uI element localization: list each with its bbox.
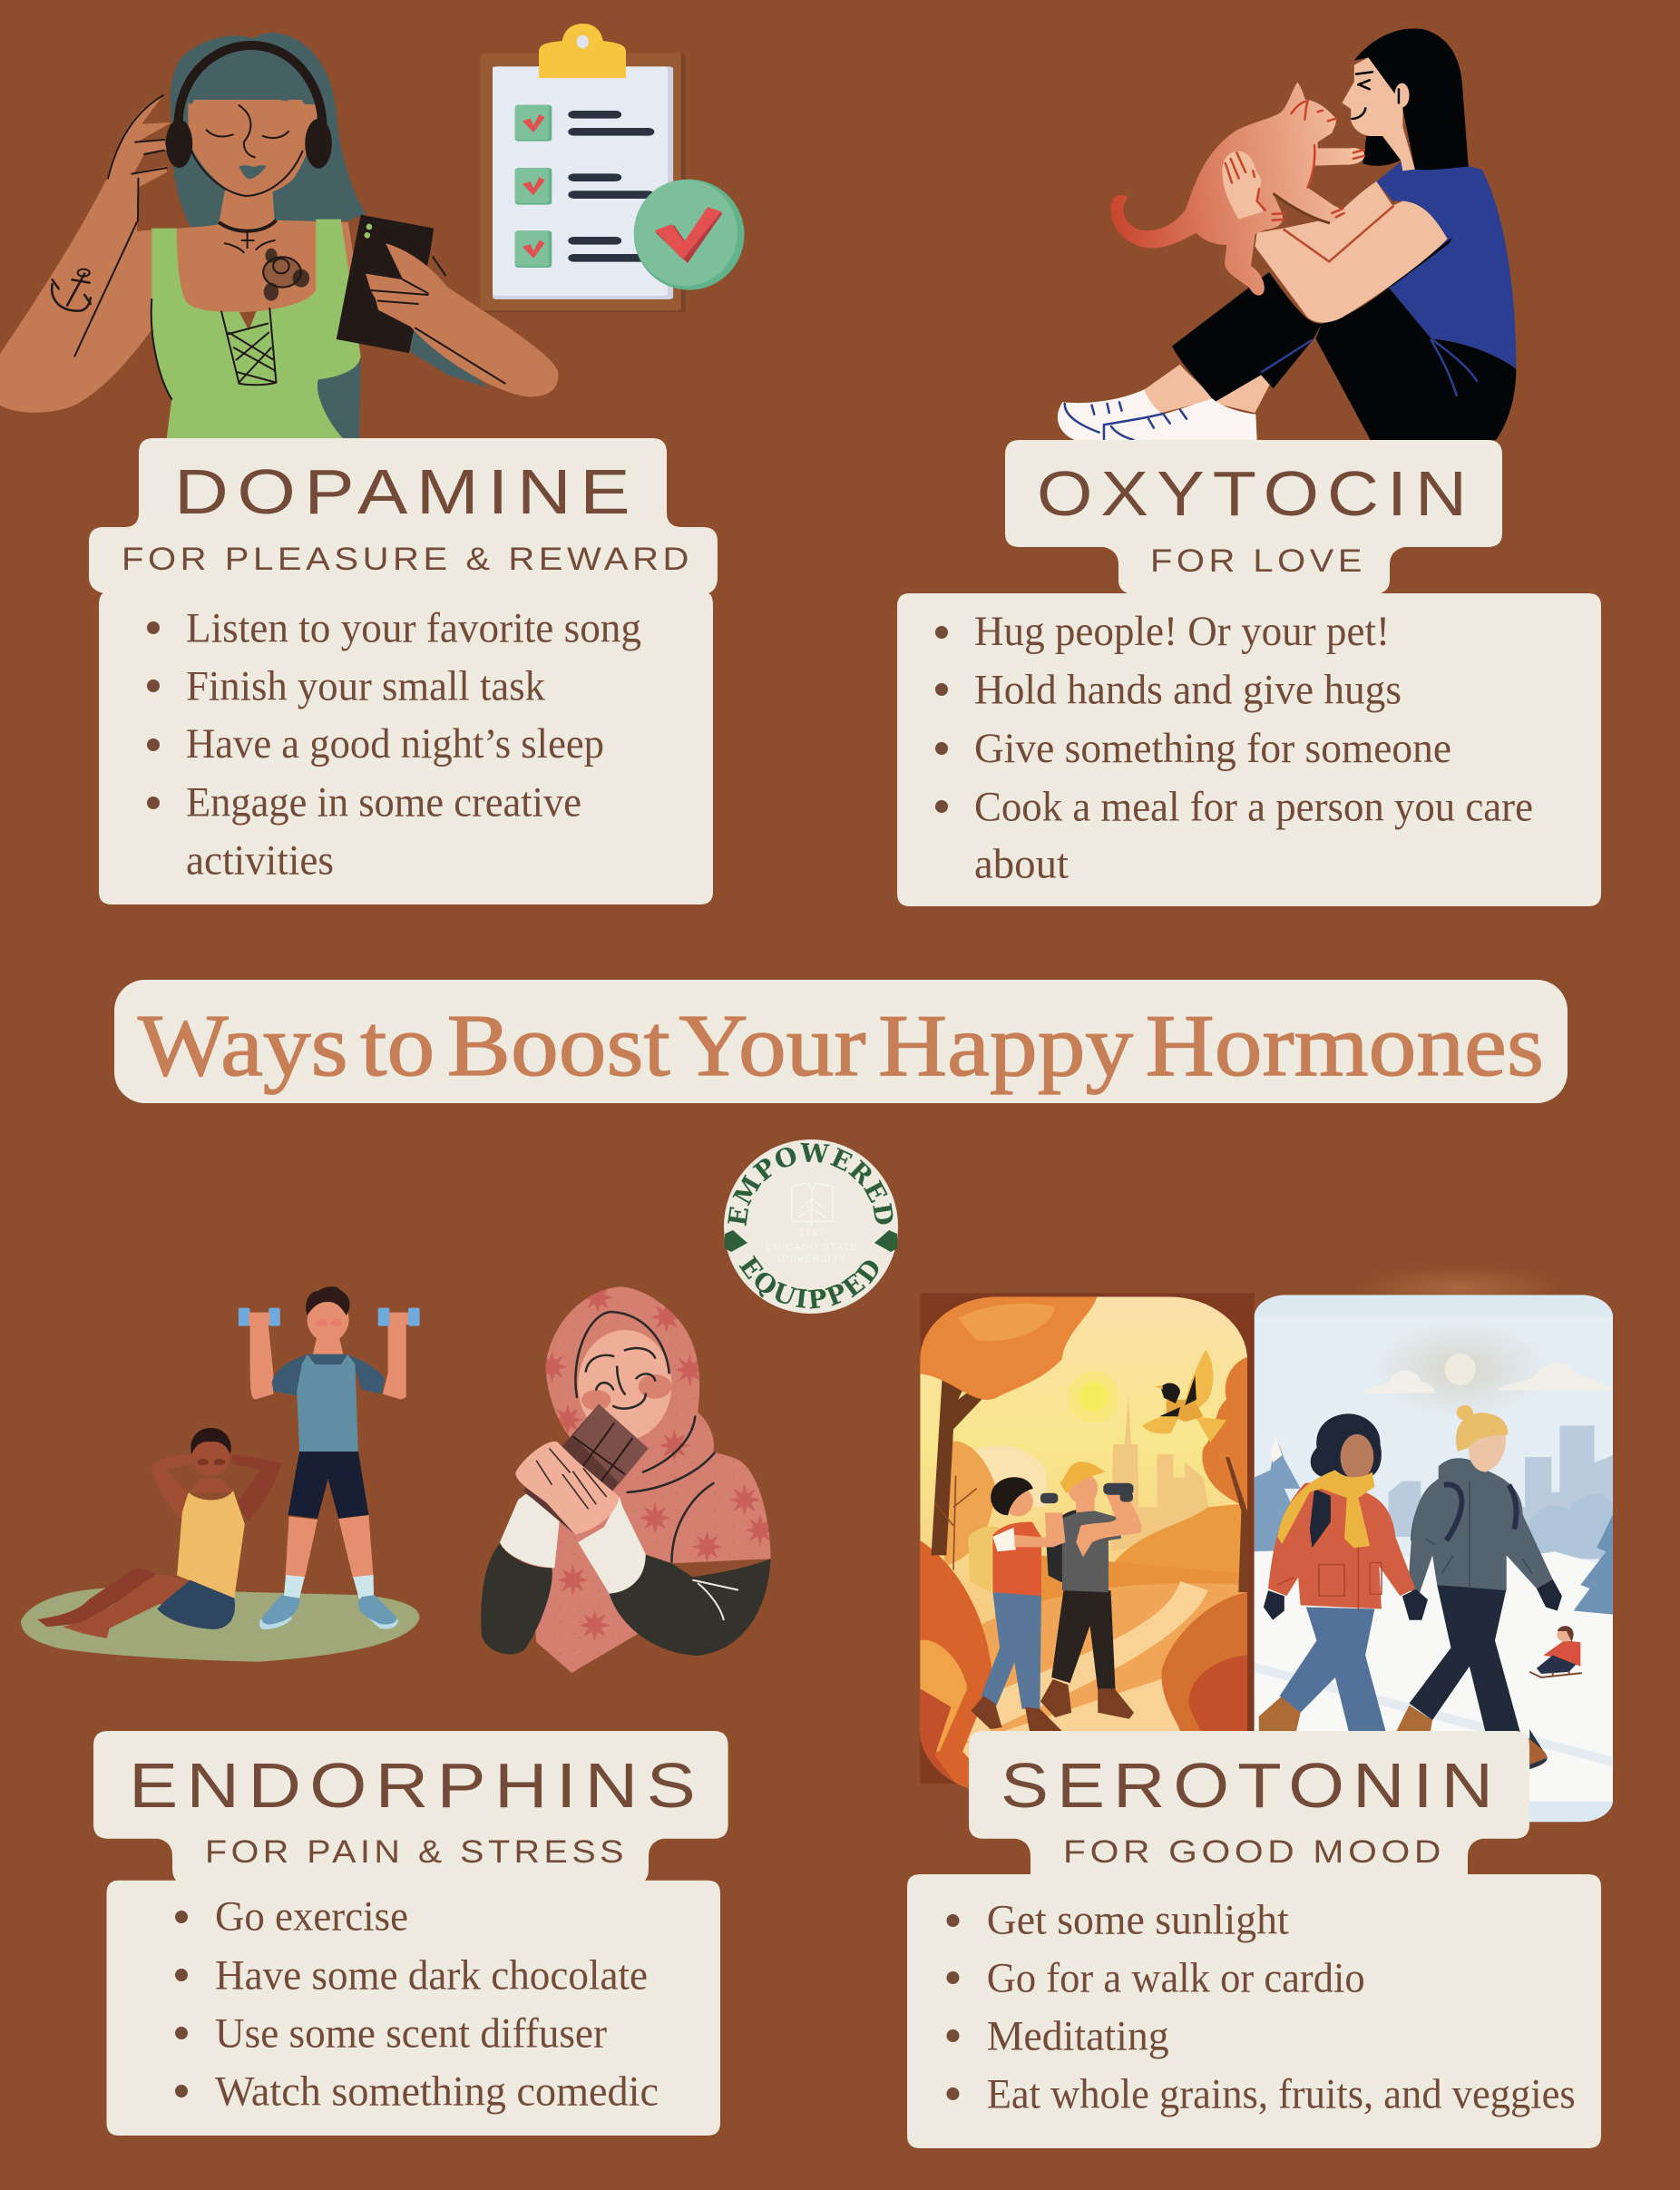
- bullet list: about: [974, 840, 1069, 887]
- man with dumbbells: [239, 1286, 420, 1629]
- sled child: [1529, 1626, 1582, 1677]
- bullet list: [935, 608, 1533, 887]
- bullet list: Watch something comedic: [215, 2068, 659, 2116]
- heading: DOPAMINE: [174, 456, 639, 527]
- scene: autumn: [920, 1296, 1247, 1793]
- tattoo: anchor: [52, 274, 91, 311]
- subheading: FOR PAIN & STRESS: [205, 1834, 628, 1870]
- heading: ENDORPHINS: [129, 1750, 704, 1821]
- panel shape: [907, 1731, 1601, 2148]
- badge text top: EMPOWERED: [728, 1143, 893, 1227]
- chocolate bar: [523, 1404, 649, 1535]
- illustration: clipboard with checklist: [480, 24, 745, 312]
- bird: [1142, 1350, 1226, 1442]
- illustration: woman with headphones and phone: [0, 33, 559, 438]
- bullet list: Cook a meal for a person you care: [974, 784, 1533, 831]
- bullet list: Listen to your favorite song: [186, 604, 641, 651]
- cat: [1110, 83, 1364, 296]
- panel shape: [89, 438, 718, 904]
- heading: SEROTONIN: [1001, 1750, 1501, 1821]
- university text: 1887: [799, 1227, 825, 1238]
- panel shape: [897, 440, 1601, 906]
- icon: side hands: [725, 1230, 897, 1252]
- bullet list: Eat whole grains, fruits, and veggies: [987, 2070, 1576, 2117]
- bullet list: Finish your small task: [186, 662, 545, 709]
- people: winter walkers: [1259, 1405, 1562, 1769]
- illustration: woman hugging cat: [1058, 28, 1516, 440]
- people: birdwatchers: [968, 1462, 1141, 1732]
- bullet list: Have some dark chocolate: [215, 1952, 648, 1999]
- bullet list: Hug people! Or your pet!: [974, 608, 1390, 655]
- icon: big check badge: [634, 180, 745, 290]
- tattoo: rose: [263, 249, 309, 301]
- subheading: FOR GOOD MOOD: [1063, 1834, 1445, 1870]
- bullet list: [947, 1896, 1576, 2117]
- bullet list: Meditating: [987, 2012, 1169, 2059]
- man doing situps: [37, 1428, 281, 1638]
- panel: oxytocin: [897, 440, 1601, 906]
- badge: empowered equipped: [724, 1139, 898, 1314]
- badge text bottom: EQUIPPED: [738, 1256, 878, 1309]
- title banner: [114, 980, 1568, 1103]
- university text: UNIVERSITY: [777, 1254, 846, 1265]
- bullet list: Hold hands and give hugs: [974, 666, 1402, 713]
- lacing: [221, 308, 276, 385]
- bullet list: [175, 1892, 659, 2116]
- illustration: woman with chocolate: [481, 1282, 781, 1676]
- subheading: FOR PLEASURE & REWARD: [122, 542, 693, 577]
- illustration: autumn and winter walking scenes: [920, 1266, 1613, 1822]
- bullet list: Go exercise: [215, 1892, 408, 1940]
- checklist rows: [515, 105, 654, 268]
- bullet list: Go for a walk or cardio: [987, 1954, 1365, 2001]
- illustration: two men exercising: [21, 1286, 420, 1662]
- panel: serotonin: [907, 1731, 1601, 2148]
- university text: [766, 1227, 858, 1265]
- panel: dopamine: [89, 438, 718, 904]
- bullet list: activities: [186, 836, 334, 884]
- scarf flowers and speckle: [535, 1288, 769, 1667]
- bullet list: [147, 604, 641, 884]
- heading: OXYTOCIN: [1037, 458, 1475, 529]
- subheading: FOR LOVE: [1150, 543, 1366, 579]
- panel: endorphins: [93, 1731, 728, 2136]
- bullet list: Get some sunlight: [987, 1896, 1289, 1943]
- bullet list: Have a good night’s sleep: [186, 720, 604, 767]
- bullet list: Give something for someone: [974, 725, 1451, 772]
- university text: CHICAGO STATE: [766, 1242, 858, 1253]
- icon: book tree: [792, 1183, 833, 1225]
- panel shape: [93, 1731, 728, 2136]
- bullet list: Engage in some creative: [186, 778, 581, 826]
- title: Ways to Boost Your Happy Hormones: [138, 997, 1544, 1095]
- bullet list: Use some scent diffuser: [215, 2010, 607, 2058]
- scene: winter: [1255, 1295, 1613, 1822]
